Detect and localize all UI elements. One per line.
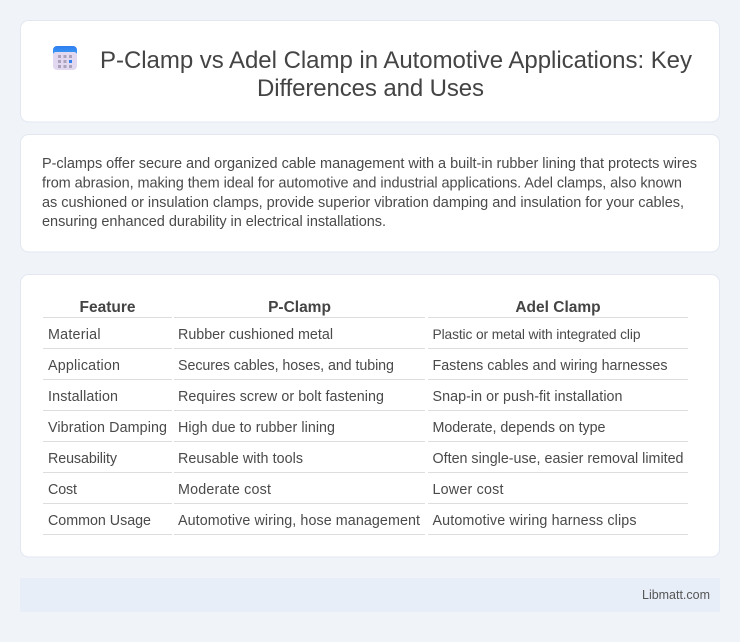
table header: Adel Clamp <box>515 299 601 316</box>
row: vibration damping: Vibration Damping <box>48 420 167 436</box>
row: application: Fastens cables and wiring harnesses <box>432 358 668 374</box>
row: reusability: Reusable with tools <box>178 451 303 467</box>
panel: comparison table <box>20 274 720 557</box>
row: reusability <box>48 451 684 467</box>
row: cost: Moderate cost <box>178 482 271 498</box>
row: reusability: Often single-use, easier removal limited <box>432 451 684 467</box>
title <box>100 47 692 102</box>
row: application <box>48 358 668 374</box>
row: vibration damping: Moderate, depends on type <box>432 420 606 436</box>
panel: header <box>20 20 720 122</box>
row: installation: Installation <box>48 389 118 405</box>
row: application: Secures cables, hoses, and tubing <box>178 358 394 374</box>
panel: introduction text: as cushioned or insulation clamps, provide superior vibration damping and insulation for your cables, <box>42 195 684 211</box>
row: vibration damping: High due to rubber lining <box>178 420 335 436</box>
row: material: Material <box>48 327 100 343</box>
panel: introduction text: ensuring enhanced durability in electrical installations. <box>42 214 386 230</box>
row: cost <box>48 482 504 498</box>
title: Differences and Uses <box>257 75 484 102</box>
row: installation: Snap-in or push-fit installation <box>432 389 623 405</box>
panel: introduction text <box>20 134 720 252</box>
row: reusability: Reusability <box>48 451 118 467</box>
icon: calendar <box>53 46 77 70</box>
table header: P-Clamp <box>268 299 331 316</box>
row: common usage: Common Usage <box>48 513 151 529</box>
row: application: Application <box>48 358 120 374</box>
footer bar <box>20 578 720 612</box>
row: common usage <box>48 513 636 529</box>
table header: Feature <box>80 299 136 316</box>
row: installation <box>48 389 623 405</box>
row: vibration damping <box>48 420 606 436</box>
row: material: Plastic or metal with integrated clip <box>432 327 641 342</box>
row: common usage: Automotive wiring harness clips <box>432 513 636 529</box>
row: cost: Lower cost <box>432 482 504 498</box>
row: material: Rubber cushioned metal <box>178 327 333 343</box>
panel: introduction text: from abrasion, making them ideal for automotive and industrial applications. Adel clamps, also known <box>42 176 682 192</box>
row: cost: Cost <box>48 482 77 498</box>
row: material <box>48 327 641 343</box>
panel: introduction text: P-clamps offer secure and organized cable management with a built-in rubber lining that protects wires <box>42 156 697 172</box>
footer bar: Libmatt.com <box>642 588 710 602</box>
row: common usage: Automotive wiring, hose management <box>178 513 420 529</box>
row: installation: Requires screw or bolt fastening <box>178 389 384 405</box>
table header <box>80 299 601 316</box>
title: P-Clamp vs Adel Clamp in Automotive Applications: Key <box>100 47 692 74</box>
